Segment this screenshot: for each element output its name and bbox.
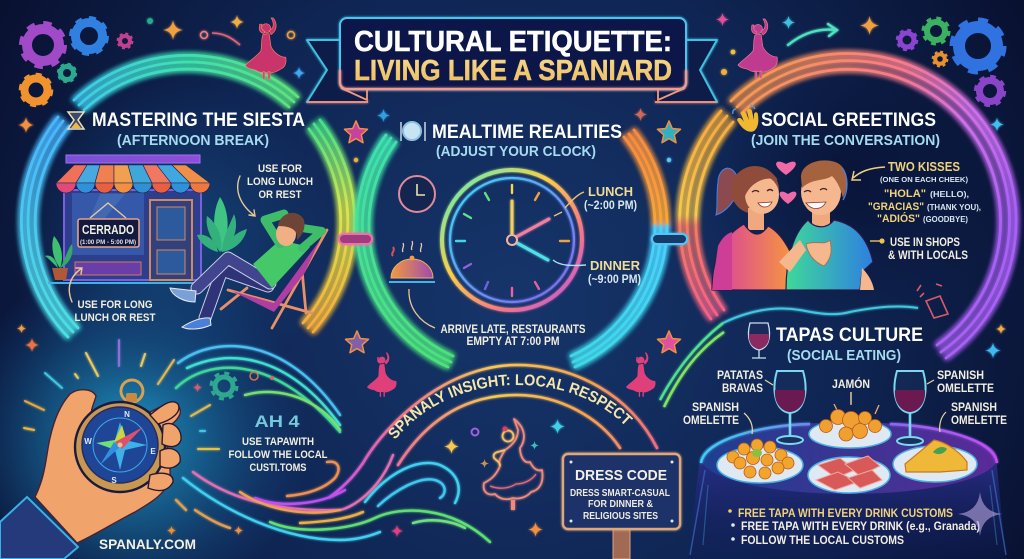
shop illustration	[45, 155, 210, 284]
neon ring: siesta	[21, 55, 355, 337]
table	[688, 422, 1006, 559]
reclining man in chair	[170, 213, 327, 329]
callout: lunch left: USE FOR LONG	[78, 299, 152, 311]
small clock	[399, 176, 435, 212]
neon ring: mealtime	[357, 130, 667, 367]
compass letters: W	[84, 437, 92, 446]
label: lunch	[554, 184, 637, 216]
label: lunch: LUNCH	[588, 184, 633, 199]
gears right	[897, 18, 1004, 106]
insight arch	[328, 362, 660, 500]
hand holding compass	[0, 380, 181, 559]
note: arrive late: ARRIVE LATE, RESTAURANTS	[440, 324, 586, 336]
awning	[56, 165, 210, 193]
callout: lunch right: LONG LUNCH	[247, 176, 313, 188]
food labels: OMELETTE	[951, 413, 1007, 427]
heading: SOCIAL GREETINGS	[761, 110, 936, 131]
callout: two kisses: "GRACIAS"	[868, 201, 924, 213]
tapas bullet list: FREE TAPA WITH EVERY DRINK CUSTOMS	[738, 508, 953, 520]
heading: MASTERING THE SIESTA	[92, 110, 305, 131]
heading: MEALTIME REALITIES	[432, 122, 622, 143]
plate: tortilla	[893, 440, 977, 482]
shoes	[170, 288, 196, 302]
panel: mealtime	[389, 122, 641, 348]
gears left	[20, 18, 132, 106]
heading: TAPAS CULTURE	[776, 325, 923, 346]
icon: plate	[401, 122, 425, 141]
tapas bullet list	[728, 508, 980, 547]
ring clasp right	[652, 234, 687, 244]
subheading: (ADJUST YOUR CLOCK)	[436, 143, 596, 160]
note: lower left: FOLLOW THE LOCAL	[228, 449, 328, 461]
callout: lunch left	[69, 268, 156, 324]
panel: tapas	[660, 307, 1007, 559]
compass letters	[84, 410, 156, 485]
couple illustration	[712, 160, 874, 290]
callout: use in shops: & WITH LOCALS	[888, 250, 968, 262]
subheading: (AFTERNOON BREAK)	[117, 132, 269, 149]
food labels: OMELETTE	[683, 413, 739, 427]
sign: cerrado: (1:00 PM - 5:00 PM)	[80, 240, 136, 246]
large plant	[197, 197, 247, 252]
compass letters: S	[111, 476, 117, 485]
legs	[197, 258, 270, 318]
compass letters: E	[150, 447, 156, 456]
callout: two kisses: (THANK YOU),	[927, 203, 981, 212]
icon: waving hand	[733, 105, 758, 132]
note: arrive late	[409, 289, 586, 348]
plate: jamon	[808, 456, 890, 493]
food labels: SPANISH	[951, 400, 997, 414]
door	[150, 200, 192, 280]
label: dinner: DINNER	[590, 258, 641, 273]
subheading: (JOIN THE CONVERSATION)	[751, 132, 940, 149]
small shapes near dancer	[472, 428, 539, 468]
callout: two kisses: (ONE ON EACH CHEEK)	[880, 175, 969, 184]
panel: greetings	[712, 105, 981, 318]
callout: two kisses	[852, 159, 981, 225]
callout: two kisses: "ADIÓS"	[877, 212, 920, 225]
dancers	[245, 18, 777, 397]
ponytail	[716, 168, 738, 215]
callout: lunch left: LUNCH OR REST	[74, 312, 156, 324]
plate: patatas bravas	[717, 439, 803, 483]
note: lower left	[228, 412, 328, 474]
sign: dress code: DRESS SMART-CASUAL	[570, 488, 670, 499]
callout: two kisses: "HOLA"	[884, 188, 926, 200]
arrow: top right	[788, 24, 837, 45]
title banner	[307, 18, 717, 102]
note: lower left: CUSTI.TOMS	[250, 462, 306, 474]
sparkle watermark	[958, 492, 1002, 536]
dots near gear	[250, 372, 274, 380]
sign: cerrado: CERRADO	[82, 223, 134, 237]
title line 2: LIVING LIKE A SPANIARD	[354, 55, 672, 87]
icon: wine glass	[748, 323, 770, 358]
wine glasses	[775, 371, 925, 445]
sleeve	[0, 497, 78, 559]
flowing neon waves	[24, 340, 490, 542]
tapas bullet list: FOLLOW THE LOCAL CUSTOMS	[741, 535, 904, 547]
compass body	[75, 402, 165, 492]
plate: jamon bites back	[809, 392, 891, 448]
label: lunch: (~2:00 PM)	[584, 200, 637, 212]
note: lower left: AH 4	[254, 412, 300, 431]
divider swoosh	[723, 307, 918, 323]
food labels: BRAVAS	[722, 381, 763, 395]
woman	[712, 166, 796, 290]
sign: dress code: RELIGIOUS SITES	[583, 511, 658, 522]
food labels: SPANISH	[937, 368, 984, 382]
tapas bullet list: FREE TAPA WITH EVERY DRINK (e.g., Granada)	[741, 521, 980, 533]
title line 1: CULTURAL ETIQUETTE:	[354, 26, 672, 58]
chair	[221, 230, 327, 328]
food labels: OMELETTE	[937, 381, 994, 395]
callout: lunch right: USE FOR	[258, 163, 302, 175]
head	[276, 222, 296, 246]
food labels	[683, 368, 1007, 434]
callout: two kisses: (GOODBYE)	[923, 215, 968, 224]
stars	[344, 121, 681, 353]
callout: use in shops	[870, 237, 968, 262]
label: dinner: (~9:00 PM)	[588, 274, 641, 286]
callout: use in shops: USE IN SHOPS	[890, 237, 960, 249]
potted plant	[45, 236, 72, 280]
callout: lunch right	[238, 163, 313, 216]
main clock	[442, 170, 582, 310]
icon: cloche	[389, 241, 435, 282]
banner box	[340, 18, 686, 89]
torso	[253, 240, 310, 288]
food labels: JAMÓN	[832, 376, 870, 391]
panel: siesta	[45, 110, 327, 329]
sign: dress code: DRESS CODE	[575, 467, 667, 484]
hearts	[776, 162, 796, 175]
compass ring	[121, 380, 143, 402]
compass rose	[96, 422, 147, 470]
subheading: (SOCIAL EATING)	[787, 347, 901, 364]
note: lower left: USE TAPAWITH	[242, 436, 314, 448]
compass letters: N	[124, 410, 130, 419]
neon ring: greetings	[680, 53, 1016, 358]
note: arrive late: EMPTY AT 7:00 PM	[466, 336, 560, 348]
label: dinner	[553, 258, 641, 286]
ribbon tails	[307, 40, 717, 102]
icon: hourglass	[68, 112, 84, 129]
fingers	[148, 402, 181, 490]
hand	[35, 390, 180, 543]
man	[779, 160, 874, 290]
food labels: PATATAS	[717, 368, 763, 382]
food labels: SPANISH	[692, 400, 739, 414]
arch text: SPANALY INSIGHT: LOCAL RESPECT	[388, 374, 634, 438]
callout: lunch right: OR REST	[258, 189, 302, 201]
brand: SPANALY.COM	[99, 536, 196, 552]
gear small bottom	[211, 373, 237, 399]
ring clasp left	[339, 234, 372, 244]
sign: cerrado	[78, 203, 139, 247]
sign: dress code: FOR DINNER &	[588, 499, 653, 510]
clock hands	[512, 201, 549, 260]
icon: tag	[917, 284, 948, 318]
arms	[265, 214, 284, 244]
callout: two kisses: TWO KISSES	[888, 159, 960, 174]
callout: two kisses: (HELLO),	[930, 190, 969, 199]
flamenco dancer outline	[484, 419, 543, 510]
sign: dress code	[563, 454, 680, 559]
